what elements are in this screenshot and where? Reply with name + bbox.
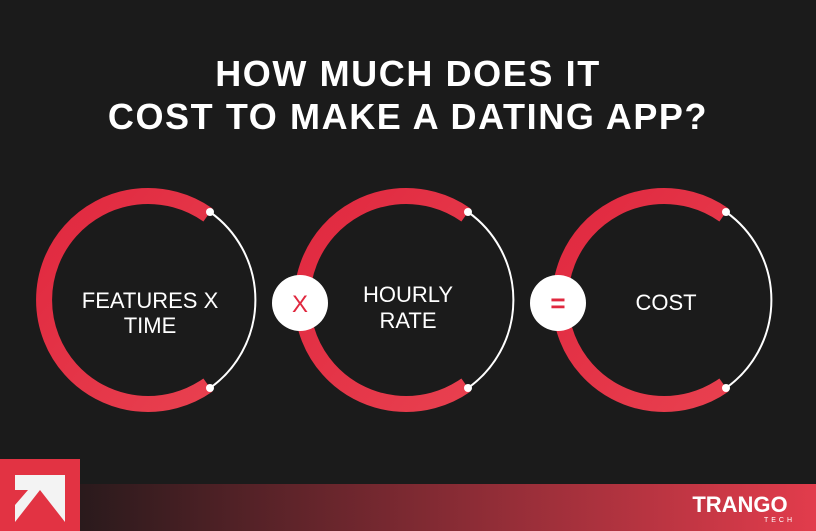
circle: features x time: TIME	[124, 313, 176, 338]
title	[108, 53, 708, 137]
circle: cost: COST	[635, 290, 697, 315]
logo: icon square	[0, 459, 80, 531]
circle: hourly rate: RATE	[379, 308, 437, 333]
operator: equals	[530, 275, 586, 331]
operator: multiply: X	[292, 291, 308, 318]
operator: equals: =	[550, 288, 566, 318]
circle: features x time	[44, 196, 255, 404]
title: COST TO MAKE A DATING APP?	[108, 96, 708, 137]
title: HOW MUCH DOES IT	[215, 53, 601, 94]
circle: hourly rate: HOURLY	[363, 282, 453, 307]
circle: hourly rate	[302, 196, 513, 404]
circle: cost	[560, 196, 771, 404]
operator: multiply	[272, 275, 328, 331]
footer bar	[80, 484, 816, 531]
logo: trango tech: TRANGO	[692, 492, 788, 517]
logo: trango tech: TECH	[764, 517, 795, 524]
circle: features x time: FEATURES X	[82, 288, 219, 313]
